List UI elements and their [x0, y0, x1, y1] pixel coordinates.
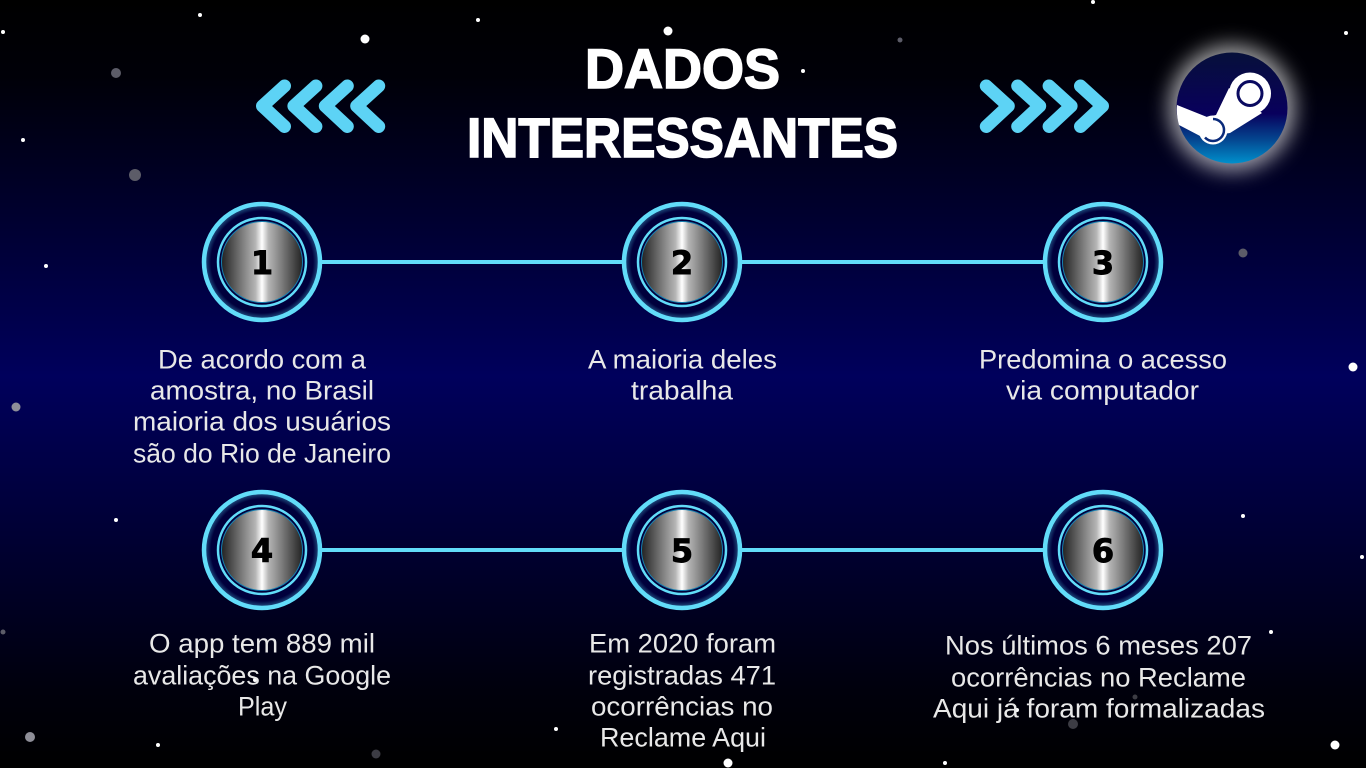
- text: step 1: amostra, no Brasil: [150, 376, 374, 406]
- icon: left arrows: [262, 86, 379, 126]
- text: step 6: ocorrências no Reclame: [951, 662, 1246, 692]
- step 6 badge: 6: [1092, 532, 1114, 570]
- title: [467, 37, 898, 169]
- text: step 4: Play: [238, 692, 287, 722]
- text: step 5: [588, 628, 776, 752]
- text: step 5: ocorrências no: [591, 692, 773, 722]
- text: step 5: Reclame Aqui: [600, 722, 766, 752]
- text: step 1: são do Rio de Janeiro: [133, 438, 391, 468]
- text: step 4: O app tem 889 mil: [149, 628, 375, 658]
- connector row 1: [320, 260, 1045, 264]
- connector row 2: [320, 548, 1045, 552]
- text: step 6: [933, 630, 1265, 724]
- text: step 1: De acordo com a: [158, 344, 367, 374]
- step 1 badge: 1: [251, 244, 273, 282]
- text: step 6: Nos últimos 6 meses 207: [945, 630, 1252, 660]
- text: step 2: trabalha: [631, 376, 734, 406]
- text: step 6: Aqui já foram formalizadas: [933, 694, 1265, 724]
- step 2 badge: 2: [671, 244, 693, 282]
- text: step 2: A maioria deles: [588, 344, 777, 374]
- step 1 badge: [204, 204, 320, 320]
- text: step 4: avaliações na Google: [133, 660, 391, 690]
- step 2 badge: [624, 204, 740, 320]
- text: step 3: via computador: [1006, 376, 1199, 406]
- text: step 4: [133, 628, 391, 722]
- text: step 1: maioria dos usuários: [133, 406, 391, 436]
- title: INTERESSANTES: [467, 106, 898, 169]
- title: DADOS: [585, 37, 780, 100]
- step 5 badge: [624, 492, 740, 608]
- step 4 badge: [204, 492, 320, 608]
- text: step 5: Em 2020 foram: [589, 628, 776, 658]
- text: step 3: [979, 344, 1227, 406]
- icon: steam logo: [1169, 45, 1295, 171]
- text: step 5: registradas 471: [588, 660, 776, 690]
- text: step 3: Predomina o acesso: [979, 344, 1227, 374]
- text: step 1: [133, 344, 391, 468]
- step 4 badge: 4: [251, 532, 273, 570]
- step 3 badge: [1045, 204, 1161, 320]
- step 3 badge: 3: [1092, 244, 1114, 282]
- step 5 badge: 5: [671, 532, 693, 570]
- step 6 badge: [1045, 492, 1161, 608]
- text: step 2: [588, 344, 777, 406]
- icon: right arrows: [986, 86, 1102, 126]
